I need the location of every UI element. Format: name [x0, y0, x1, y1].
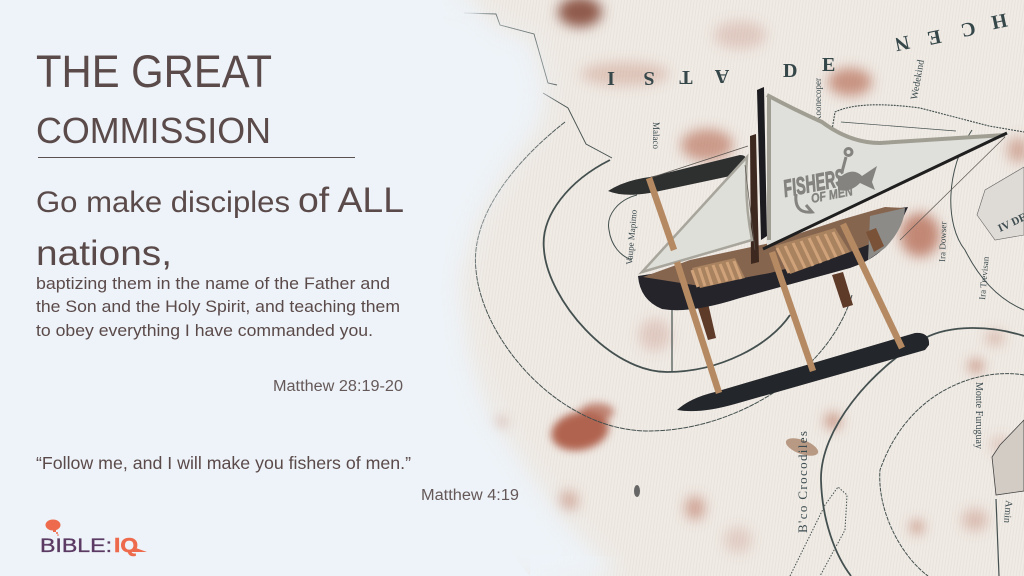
wordmark iq: IQ: [114, 535, 138, 557]
deck slats: [692, 232, 844, 287]
title: [36, 46, 272, 151]
mainsail logo: fishers of men: [781, 148, 877, 212]
main statement: nations,: [36, 234, 172, 273]
quote: “Follow me, and I will make you fishers of men.”: [36, 453, 411, 473]
map lettering: T: [679, 66, 693, 88]
antique map photo background: Ira Trevisan: [977, 256, 991, 300]
map lettering: [607, 8, 1009, 89]
map lettering: N: [892, 31, 912, 55]
main mast: [757, 87, 767, 240]
map lettering: S: [643, 67, 655, 89]
second mast: [750, 134, 759, 264]
mainsail: [767, 93, 1005, 247]
tan blotch: [784, 435, 820, 459]
map lettering: D: [783, 60, 797, 82]
antique map photo background: Koonecoper: [813, 78, 823, 122]
antique map photo background: B'co Crocodiles: [795, 431, 810, 533]
antique map photo background: Amin: [1001, 500, 1014, 523]
grey blotch: [634, 485, 640, 497]
deck slat beds: [692, 228, 850, 288]
hook mark: [796, 148, 852, 212]
top edge fade correction: [440, 0, 485, 16]
rear outrigger float: [608, 155, 745, 195]
antique map photo background: Ira Dowser: [937, 222, 948, 262]
main statement: [36, 181, 404, 273]
boat deck: [643, 207, 905, 286]
coast land patches: [992, 420, 1024, 495]
scripture body text: [36, 274, 400, 340]
map lettering: E: [925, 25, 943, 49]
rigging: [650, 137, 1005, 250]
fish tail and body mark: [838, 166, 877, 191]
rust stains on map: [495, 0, 1024, 553]
antique map photo background: Monte Furuguay: [973, 382, 984, 449]
boom: [763, 133, 1007, 249]
map lettering: H: [989, 8, 1009, 33]
fishers text: FISHERS: [781, 165, 847, 203]
reference: Matthew 28: Matthew 28:19-20: [273, 378, 403, 395]
map lettering: C: [959, 17, 978, 41]
solid left panel: [0, 0, 530, 576]
jib sail: [642, 157, 752, 272]
heading line one: THE GREAT: [36, 46, 272, 97]
bottom edge fade correction: [530, 556, 625, 576]
front outrigger float: [677, 333, 929, 411]
map circles and coastlines: [464, 13, 1024, 576]
boat supports under hull: [697, 272, 853, 340]
map lettering: E: [822, 54, 835, 76]
heading line two: COMMISSION: [36, 110, 271, 151]
boat hull: [638, 207, 908, 310]
antique map photo background: Vaupe Mapimo: [624, 209, 639, 265]
reference: Matthew 4: Matthew 4:19: [421, 487, 519, 504]
wooden struts: [649, 178, 902, 393]
antique map photo background: Malaco: [651, 122, 661, 149]
wordmark bible: BIBLE:: [40, 535, 112, 557]
bow cleat: [866, 228, 884, 252]
bow: [868, 208, 905, 260]
map lettering: A: [714, 65, 729, 87]
wordmark tail: [133, 547, 147, 552]
scripture body text: baptizing them in the name of the Father and: [36, 274, 390, 293]
main statement: of ALL: [298, 181, 404, 220]
main statement: Go make disciples: [36, 186, 290, 219]
large rust stain: [548, 403, 614, 456]
antique map photo background: Wedekind: [909, 59, 927, 101]
map lettering: I: [607, 67, 615, 89]
soft white fade blending the map into the slide: [0, 0, 618, 576]
scripture body text: to obey everything I have commanded you.: [36, 321, 373, 340]
of men text: OF MEN: [810, 183, 854, 206]
title divider: [38, 157, 355, 158]
scripture body text: the Son and the Holy Spirit, and teaching them: [36, 297, 400, 316]
logo: Bible IQ: [40, 520, 147, 557]
icon: brain: [46, 520, 60, 536]
model outrigger boat with sails: [608, 87, 1007, 411]
antique map photo background: [440, 0, 1024, 576]
